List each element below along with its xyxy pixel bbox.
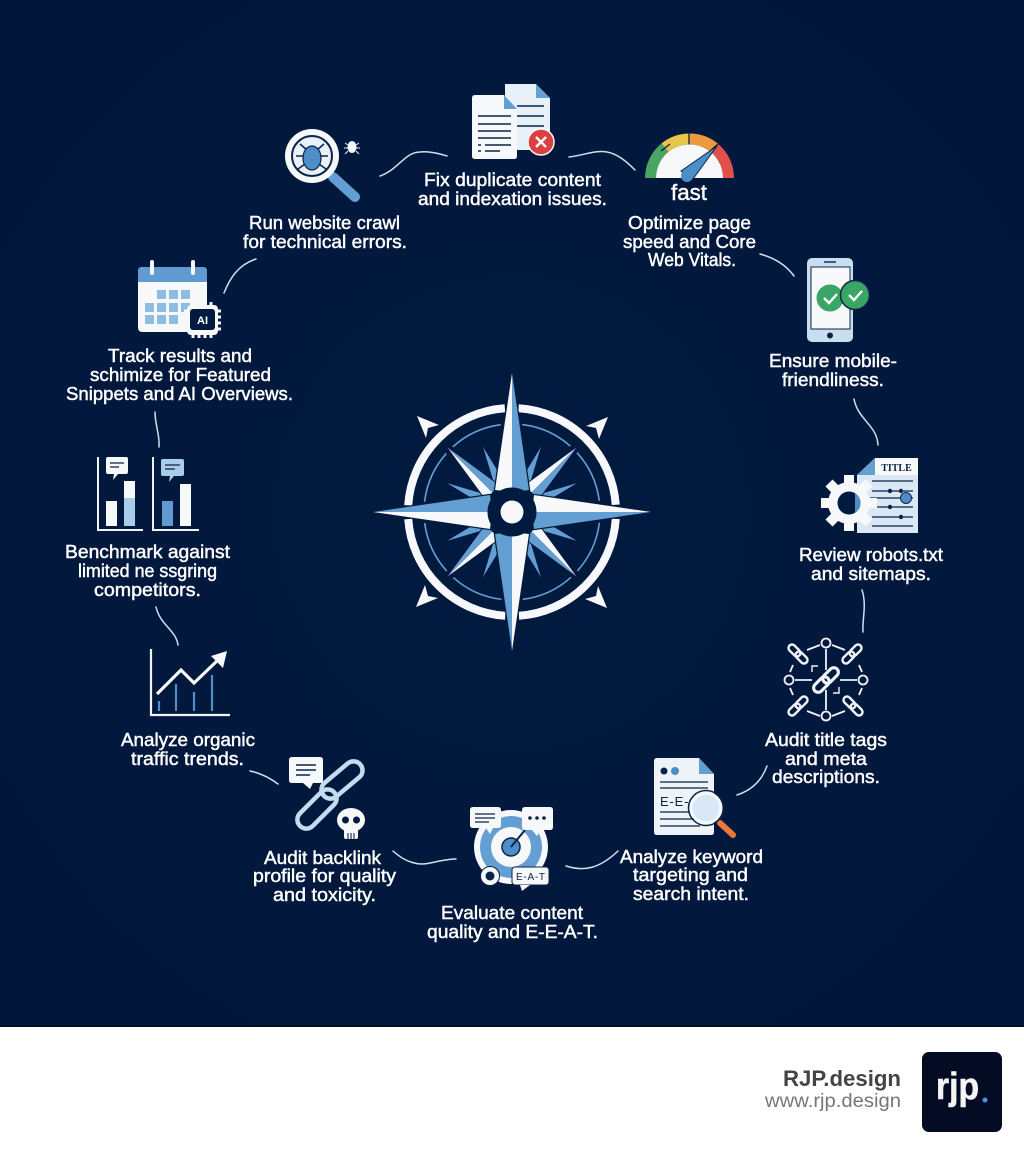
icon: comparison bar charts xyxy=(98,457,199,530)
step: analyze organic traffic xyxy=(121,649,255,769)
connector: keywords to content quality xyxy=(566,851,618,869)
step: benchmark against competitors xyxy=(65,457,230,600)
text: benchmark against competitors: Benchmark against xyxy=(65,541,230,562)
connector: traffic to benchmark xyxy=(156,607,178,645)
step: run website crawl xyxy=(243,129,407,252)
icon: speed gauge xyxy=(650,133,729,182)
brand logo: rjp xyxy=(936,1066,979,1108)
text: analyze keyword targeting: search intent. xyxy=(633,883,749,904)
text: audit backlink profile: Audit backlink xyxy=(264,847,382,868)
text: analyze organic traffic: Analyze organic xyxy=(121,729,255,750)
step: evaluate content quality xyxy=(427,807,598,942)
step: optimize page speed xyxy=(623,133,756,270)
text: audit title tags: and meta xyxy=(785,748,868,769)
text: audit title tags: descriptions. xyxy=(772,766,880,787)
text: evaluate content quality: Evaluate content xyxy=(441,902,583,923)
brand logo xyxy=(922,1052,1002,1132)
text: optimize page speed: Web Vitals. xyxy=(648,249,736,270)
icon: target with speech bubbles: E-A-T xyxy=(516,872,545,883)
text: fast: fast xyxy=(671,180,707,205)
text: fix duplicate content: and indexation issues. xyxy=(418,188,607,209)
icon: gear and document: TITLE xyxy=(881,463,912,474)
text: track results: Track results and xyxy=(108,345,252,366)
brand text xyxy=(764,1066,901,1112)
step: fix duplicate content xyxy=(418,84,607,209)
connector: robots to title tags xyxy=(862,590,864,632)
text: optimize page speed: Optimize page xyxy=(628,212,751,233)
icon: phone with check marks xyxy=(807,258,870,342)
text: benchmark against competitors: limited ne ssgring xyxy=(78,560,217,581)
brand text: RJP.design xyxy=(783,1066,901,1091)
icon: chain, speech bubble and skull xyxy=(289,757,366,839)
central compass rose xyxy=(373,373,651,651)
connector: track to crawl xyxy=(224,259,256,293)
step: review robots and sitemaps xyxy=(799,458,943,584)
step: track results xyxy=(66,262,293,404)
icon: magnifier with bug xyxy=(285,129,360,197)
icon: E-E-A document with magnifier xyxy=(654,758,733,835)
connector: duplicate content to speed xyxy=(569,152,635,170)
connector: crawl to duplicate content xyxy=(380,152,447,176)
icon: gear and document xyxy=(821,458,918,533)
step: ensure mobile-friendliness xyxy=(769,258,897,390)
text: optimize page speed: speed and Core xyxy=(623,231,756,252)
icon: calendar with AI chip xyxy=(138,262,221,338)
icon: calendar with AI chip: AI xyxy=(197,315,208,327)
step: audit backlink profile xyxy=(253,757,397,905)
icon: target with speech bubbles xyxy=(470,807,553,891)
text: run website crawl: for technical errors. xyxy=(243,231,407,252)
text: run website crawl: Run website crawl xyxy=(249,212,400,233)
text: analyze keyword targeting: targeting and xyxy=(633,864,748,885)
text: fix duplicate content: Fix duplicate content xyxy=(424,169,601,190)
text: analyze organic traffic: traffic trends. xyxy=(131,748,244,769)
text: benchmark against competitors: competitors. xyxy=(94,579,201,600)
text: review robots and sitemaps: Review robots.txt xyxy=(799,544,943,565)
footer band xyxy=(0,1027,1024,1154)
text: track results: Snippets and AI Overviews. xyxy=(66,383,293,404)
icon: E-E-A document with magnifier: E-E-A xyxy=(660,794,698,809)
icon: link network xyxy=(784,638,868,720)
text: ensure mobile-friendliness: Ensure mobile- xyxy=(769,350,897,371)
connector: benchmark to track xyxy=(155,412,159,447)
text: ensure mobile-friendliness: friendliness. xyxy=(782,369,884,390)
connector: content quality to backlinks xyxy=(393,851,456,864)
connector: backlinks to traffic xyxy=(250,771,278,784)
connector: title tags to keywords xyxy=(737,766,767,795)
text: analyze keyword targeting: Analyze keyword xyxy=(620,846,763,867)
text: review robots and sitemaps: and sitemaps. xyxy=(811,563,931,584)
icon: rising line chart xyxy=(151,649,230,715)
step: audit title tags xyxy=(765,638,887,787)
text: audit backlink profile: and toxicity. xyxy=(273,884,376,905)
connector: speed to mobile xyxy=(760,254,794,276)
step: analyze keyword targeting xyxy=(620,758,763,904)
icon: duplicate documents with error mark xyxy=(472,84,554,159)
text: audit backlink profile: profile for quality xyxy=(253,865,397,886)
brand text: www.rjp.design xyxy=(764,1091,901,1112)
text: track results: schimize for Featured xyxy=(90,364,271,385)
text: audit title tags: Audit title tags xyxy=(765,729,887,750)
text: evaluate content quality: quality and E-E-A-T. xyxy=(427,921,598,942)
connector: mobile to robots xyxy=(854,399,878,445)
